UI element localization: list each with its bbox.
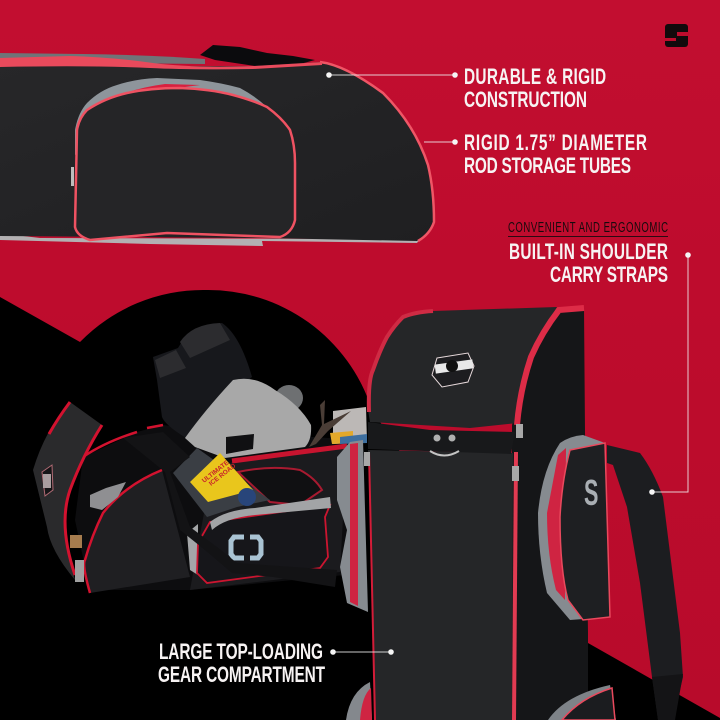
bag body xyxy=(0,62,434,241)
right side pocket xyxy=(538,435,610,620)
pocket red stripe xyxy=(90,84,200,112)
leader line xyxy=(652,255,688,492)
upper front flap xyxy=(368,307,557,428)
pocket red stripe xyxy=(547,448,566,600)
tall bag: upright backpack xyxy=(337,307,683,720)
beanie pom-pom xyxy=(275,385,303,411)
inner red rim xyxy=(83,425,163,457)
duffel: open bag on its side xyxy=(33,323,367,593)
diagonal shoulder strap xyxy=(123,432,337,587)
flap strip and hinge xyxy=(368,422,515,454)
red top band xyxy=(0,56,322,69)
callout text: RIGID 1.75” DIAMETER xyxy=(464,131,647,156)
callout text: BUILT-IN SHOULDER xyxy=(509,240,668,265)
lid logo badge xyxy=(42,465,53,496)
left gusset of side pocket xyxy=(337,440,368,612)
duffel curved front xyxy=(84,470,190,593)
metal rivets and ring xyxy=(430,434,459,456)
logo: top-right S mark xyxy=(664,24,689,47)
duffel back panel xyxy=(190,445,347,590)
black background shape xyxy=(0,290,720,720)
package title: ULTIMATE xyxy=(201,459,231,485)
callout text: LARGE TOP-LOADING xyxy=(159,640,323,665)
subheading: CONVENIENT AND ERGONOMIC xyxy=(508,219,668,236)
callout: durable and rigid construction xyxy=(326,65,606,113)
blister package xyxy=(173,448,270,517)
pocket face xyxy=(560,443,610,620)
leader line xyxy=(424,141,455,143)
main front panel xyxy=(368,450,513,720)
beanie logo xyxy=(226,434,254,454)
lid red edges xyxy=(49,402,102,575)
right red zip band xyxy=(517,308,584,425)
pocket face xyxy=(75,88,295,240)
tools and magazine xyxy=(309,400,367,447)
leader line xyxy=(333,651,391,653)
front pocket xyxy=(71,78,295,240)
callout: durable and rigid construction: CONSTRUCTION xyxy=(464,88,587,113)
callout text: DURABLE & RIGID xyxy=(464,65,606,90)
base sliver xyxy=(0,233,420,246)
zip hardware xyxy=(200,45,315,66)
duffel zip pull xyxy=(75,560,84,582)
bag side panel xyxy=(512,308,588,720)
pocket grey side xyxy=(187,524,198,575)
inner pouch xyxy=(238,468,322,505)
callout: shoulder carry straps: CARRY STRAPS xyxy=(550,263,668,288)
callout: top-loading gear compartment: GEAR COMPARTMENT xyxy=(158,663,325,688)
top bag: rod storage case xyxy=(0,45,434,246)
left piping down front xyxy=(369,452,375,720)
front red arc xyxy=(84,470,162,593)
badge logo xyxy=(432,353,474,387)
silver clip xyxy=(90,482,126,510)
duffel side lid xyxy=(33,402,102,580)
black mittens xyxy=(153,323,252,438)
pocket face xyxy=(197,505,330,583)
duffel interior xyxy=(75,425,360,590)
front small pocket xyxy=(187,497,331,583)
leader line xyxy=(329,74,455,76)
pocket grey gusset xyxy=(75,78,267,155)
grey top seam xyxy=(0,53,205,64)
callout: rod storage tubes: ROD STORAGE TUBES xyxy=(464,154,631,179)
pink edge piping xyxy=(320,62,434,241)
left red zip band xyxy=(369,311,433,412)
pocket zip pull xyxy=(71,167,74,186)
pocket S mark: S xyxy=(584,473,598,513)
pocket grey gusset xyxy=(538,435,610,620)
back shoulder strap xyxy=(607,445,683,720)
zip pulls xyxy=(364,424,523,481)
callout: shoulder carry straps xyxy=(508,219,691,495)
bottom pockets xyxy=(346,682,616,720)
blister package: ICE ROAD xyxy=(208,462,238,488)
pocket grey top strip xyxy=(210,497,331,530)
right piping down front xyxy=(514,452,516,720)
callout: rod storage tubes xyxy=(424,131,647,179)
duffel top red zip xyxy=(232,446,347,461)
gear tan block xyxy=(70,535,82,548)
grey beanie xyxy=(185,379,311,458)
callout: top-loading gear compartment xyxy=(158,640,394,688)
pocket logo xyxy=(231,537,261,558)
